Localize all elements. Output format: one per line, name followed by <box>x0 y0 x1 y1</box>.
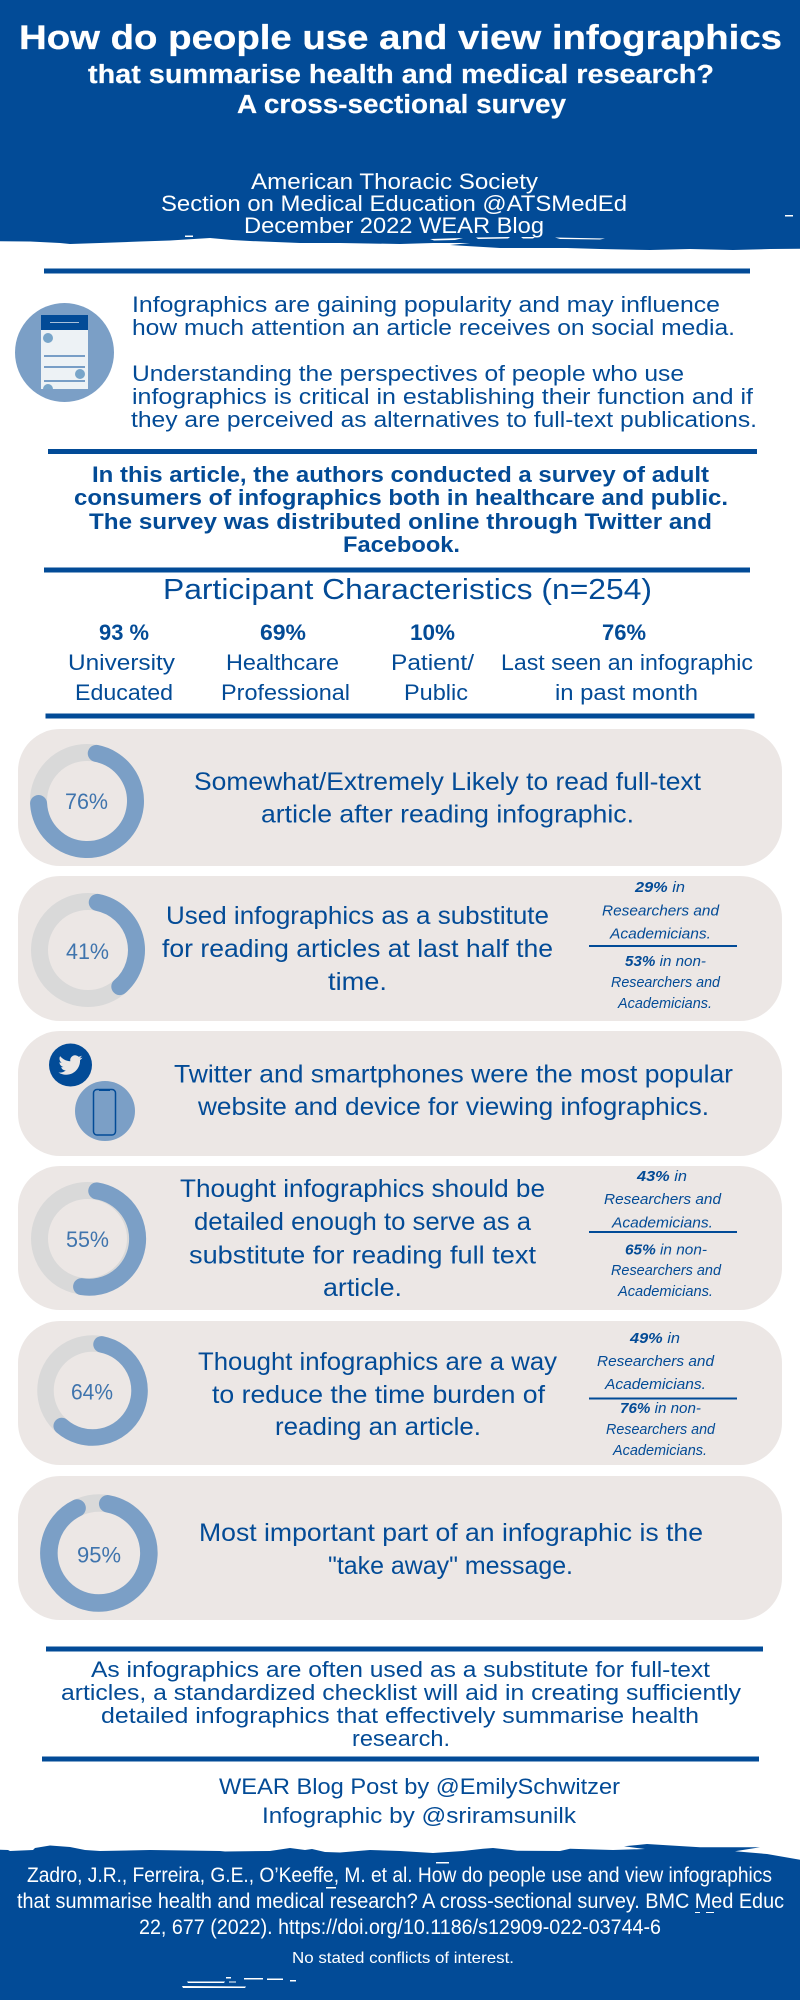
title <box>19 19 782 119</box>
finding text: to reduce the time burden of <box>212 1381 545 1409</box>
panel: substitute for reading <box>18 876 782 1021</box>
stat: healthcare professional: 69% <box>260 620 306 645</box>
finding text <box>162 902 553 996</box>
survey description: consumers of infographics both in healthcare and public. <box>74 485 728 510</box>
icon: twitter <box>49 1044 92 1086</box>
finding text: time. <box>328 968 387 996</box>
subgroup comparison: Researchers and <box>611 975 721 991</box>
author credits <box>219 1774 620 1828</box>
conclusion text <box>61 1657 741 1751</box>
subgroup comparison: Researchers and <box>604 1192 722 1208</box>
donut chart: 76%: 76% <box>65 789 108 814</box>
conflicts statement: No stated conflicts of interest. <box>292 1950 514 1967</box>
subgroup comparison: Academicians. <box>617 1284 713 1300</box>
subgroup comparison: Researchers and <box>597 1354 715 1370</box>
stat: university educated: Educated <box>75 680 173 705</box>
organisation and date: December 2022 WEAR Blog <box>244 213 544 238</box>
finding text: Most important part of an infographic is the <box>199 1519 703 1547</box>
stat: patient or public: Patient/ <box>391 650 475 675</box>
panel: likely to read full text <box>18 729 782 866</box>
citation: 22, 677 (2022). https://doi.org/10.1186/s12909-022-03744-6 <box>139 1916 661 1939</box>
donut chart: 55%: 55% <box>66 1227 109 1252</box>
subgroup comparison <box>589 880 737 1012</box>
introduction text: they are perceived as alternatives to full-text publications. <box>131 407 757 432</box>
donut chart: 41% <box>40 902 136 998</box>
finding text: reading an article. <box>275 1413 481 1441</box>
introduction text: infographics is critical in establishing their function and if <box>132 384 754 409</box>
subgroup comparison: Academicians. <box>612 1443 707 1459</box>
subgroup comparison: 53% in non- <box>625 954 706 970</box>
panel: take away message <box>18 1476 782 1620</box>
subgroup comparison: Academicians. <box>604 1377 706 1393</box>
finding text <box>199 1519 703 1580</box>
finding text: Used infographics as a substitute <box>166 902 549 930</box>
finding text <box>180 1175 545 1302</box>
finding text <box>194 768 701 828</box>
organisation and date <box>161 169 627 238</box>
finding text <box>174 1060 733 1121</box>
subgroup comparison: Academicians. <box>611 1216 713 1232</box>
donut chart: 55% <box>40 1190 138 1287</box>
stat: last seen an infographic <box>501 620 753 705</box>
stat: patient or public: Public <box>404 680 468 705</box>
subgroup comparison: 43% in <box>636 1169 687 1185</box>
introduction text: how much attention an article receives on social media. <box>132 315 735 340</box>
subgroup comparison: 65% in non- <box>625 1242 707 1258</box>
finding text: Somewhat/Extremely Likely to read full-text <box>194 768 701 796</box>
citation <box>17 1864 784 1939</box>
finding text <box>198 1348 558 1441</box>
author credits: Infographic by @sriramsunilk <box>262 1803 577 1828</box>
finding text: article. <box>323 1274 402 1302</box>
survey description: Facebook. <box>343 532 460 557</box>
subgroup comparison: 76% in non- <box>620 1401 701 1417</box>
stat: patient or public <box>391 620 475 705</box>
subgroup comparison <box>589 1169 737 1300</box>
finding text: Thought infographics are a way <box>198 1348 558 1376</box>
icon: smartphone <box>75 1081 135 1141</box>
subgroup comparison: Researchers and <box>606 1422 716 1438</box>
survey description: The survey was distributed online through Twitter and <box>89 509 712 534</box>
finding text: Twitter and smartphones were the most popular <box>174 1060 733 1088</box>
introduction text: Understanding the perspectives of people who use <box>132 361 684 386</box>
subgroup comparison: Researchers and <box>602 904 720 920</box>
subgroup comparison: 49% in <box>629 1331 680 1347</box>
conclusion text: research. <box>352 1726 450 1751</box>
subgroup comparison: Academicians. <box>617 996 712 1012</box>
finding text: substitute for reading full text <box>189 1242 536 1270</box>
stat: university educated: University <box>68 650 175 675</box>
survey description <box>74 462 728 557</box>
subgroup comparison <box>589 1331 737 1459</box>
finding text: Thought infographics should be <box>180 1175 545 1203</box>
author credits: WEAR Blog Post by @EmilySchwitzer <box>219 1774 620 1799</box>
donut chart: 76% <box>38 752 136 850</box>
stat: last seen an infographic: in past month <box>555 680 698 705</box>
conclusion text: articles, a standardized checklist will aid in creating sufficiently <box>61 1680 741 1705</box>
finding text: website and device for viewing infographics. <box>197 1093 709 1121</box>
donut chart: 64% <box>46 1344 140 1438</box>
subgroup comparison: Academicians. <box>609 926 711 942</box>
organisation and date: American Thoracic Society <box>251 169 538 194</box>
organisation and date: Section on Medical Education @ATSMedEd <box>161 191 627 216</box>
participant statistics <box>68 620 753 705</box>
stat: last seen an infographic: Last seen an infographic <box>501 650 753 675</box>
conclusion text: As infographics are often used as a substitute for full-text <box>91 1657 710 1682</box>
subgroup comparison: 29% in <box>634 880 685 896</box>
survey description: In this article, the authors conducted a survey of adult <box>92 462 710 487</box>
panel: reduce time burden <box>18 1321 782 1465</box>
donut chart: 41%: 41% <box>66 939 109 964</box>
title: that summarise health and medical research? <box>88 61 714 89</box>
introduction text: Infographics are gaining popularity and may influence <box>132 292 720 317</box>
stat: last seen an infographic: 76% <box>602 620 646 645</box>
donut chart: 95% <box>49 1503 149 1603</box>
title: How do people use and view infographics <box>19 19 782 57</box>
icon: infographic document <box>15 303 114 402</box>
finding text: "take away" message. <box>328 1552 573 1580</box>
finding text: detailed enough to serve as a <box>194 1208 531 1236</box>
conclusion text: detailed infographics that effectively summarise health <box>101 1703 699 1728</box>
donut chart: 95%: 95% <box>77 1542 121 1568</box>
stat: healthcare professional <box>221 620 350 705</box>
panel: twitter and smartphones <box>18 1031 782 1156</box>
title: A cross-sectional survey <box>237 91 567 119</box>
finding text: article after reading infographic. <box>261 800 634 828</box>
stat: healthcare professional: Professional <box>221 680 350 705</box>
stat: healthcare professional: Healthcare <box>226 650 339 675</box>
donut chart: 64%: 64% <box>71 1380 113 1404</box>
footer banner <box>0 1844 800 2000</box>
header banner <box>0 0 800 250</box>
stat: patient or public: 10% <box>410 620 455 645</box>
stat: university educated <box>68 620 175 705</box>
stat: university educated: 93 % <box>99 620 149 645</box>
subgroup comparison: Researchers and <box>611 1263 722 1279</box>
introduction text <box>131 292 757 432</box>
panel: detailed enough <box>18 1166 782 1310</box>
heading: participant characteristics: Participant Characteristics (n=254) <box>163 574 652 606</box>
finding text: for reading articles at last half the <box>162 935 553 963</box>
